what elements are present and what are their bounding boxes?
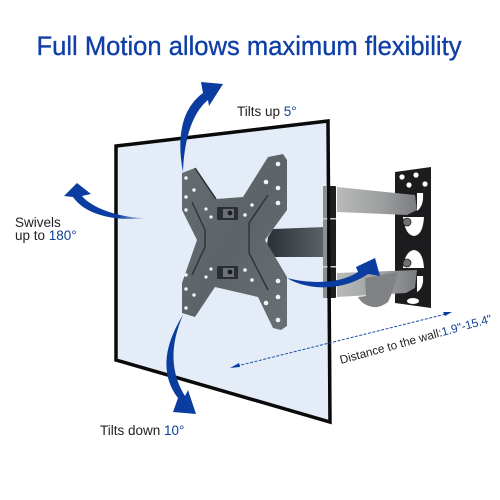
horizontal connecting arm: [267, 227, 325, 257]
wall mount arm assembly: [267, 167, 431, 308]
dashed distance arrow: [230, 312, 452, 368]
arrow: swivel left: [64, 183, 148, 219]
title: Full Motion allows maximum flexibility: [36, 31, 462, 61]
label: tilts down: Tilts down 10°: [100, 423, 184, 438]
label: swivels: Swivels: [15, 215, 61, 230]
hinge column: [323, 186, 336, 298]
plate ribs: [192, 195, 268, 290]
upper lock bracket: [217, 207, 238, 220]
label: tilts up: Tilts up 5°: [237, 104, 297, 119]
upper swing arm: [337, 187, 417, 215]
screen edge over hinge: [328, 186, 330, 422]
wall bracket: [395, 167, 431, 308]
arrow: swivel right: [287, 258, 380, 287]
lower lock bracket: [217, 266, 238, 279]
lower arm elbow: [358, 272, 398, 307]
VESA mounting plate: [182, 154, 287, 330]
lower swing arm: [337, 270, 417, 297]
label: swivels: up to 180°: [15, 228, 77, 243]
arrow: tilt down: [166, 315, 196, 414]
arrow: tilt up: [180, 82, 223, 172]
label: distance to the wall: Distance to the wall:1.9"-15.4": [338, 312, 493, 367]
tv screen panel: [116, 121, 330, 422]
plate holes: [184, 162, 280, 322]
bracket bolts: [403, 218, 411, 226]
